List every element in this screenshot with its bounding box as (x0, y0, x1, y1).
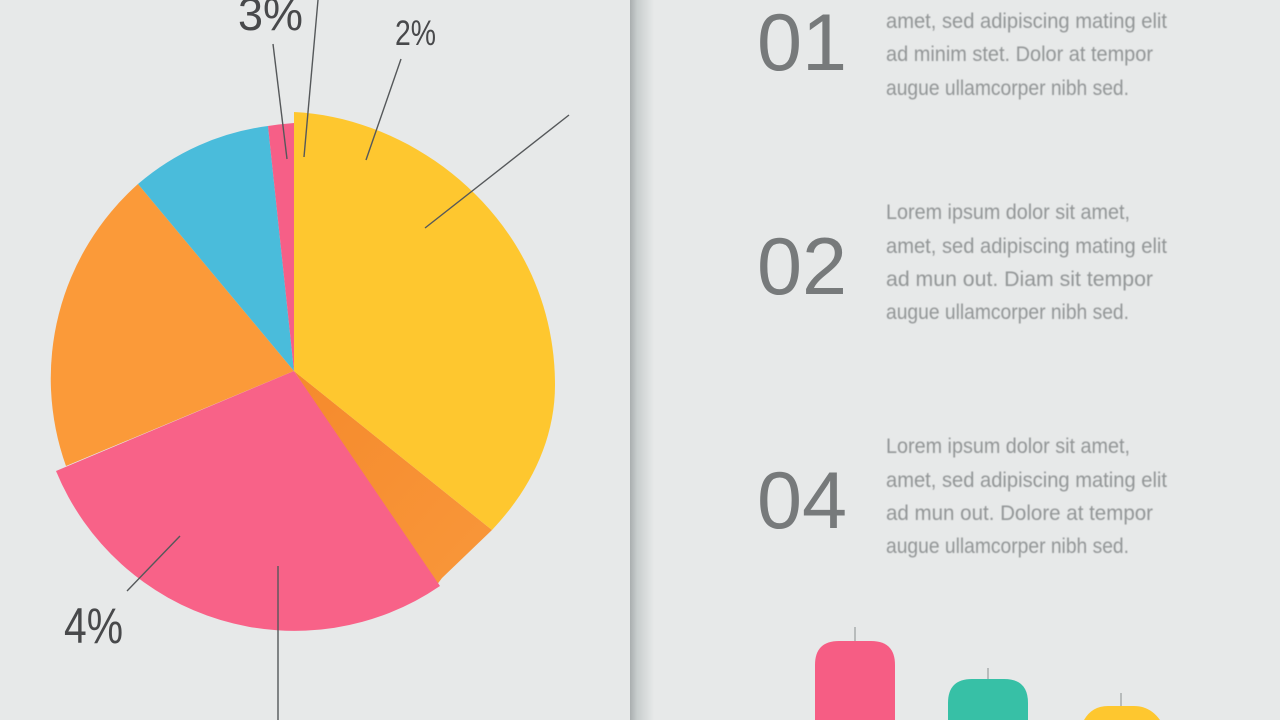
text block 04: augue ullamcorper nibh sed. (886, 535, 1129, 558)
bar: yellow (1084, 693, 1160, 720)
bar: teal (948, 668, 1028, 720)
text block 04: Lorem ipsum dolor sit amet, (886, 435, 1130, 458)
text block 01: amet, sed adipiscing mating elit (886, 10, 1167, 33)
slice: orange lower (294, 371, 492, 586)
text block 02: amet, sed adipiscing mating elit (886, 235, 1167, 258)
pie chart (51, 112, 555, 631)
slice: yellow (294, 112, 555, 530)
text block 01 (886, 10, 1167, 100)
panel divider fold (630, 0, 654, 720)
label: 4%: 4% (64, 598, 123, 654)
text block 02 (886, 201, 1167, 324)
bar chart (815, 627, 1160, 720)
number 01: 01 (757, 0, 847, 88)
text block 02: augue ullamcorper nibh sed. (886, 301, 1129, 324)
number 02: 02 (757, 222, 847, 312)
leader lines (127, 0, 569, 720)
slice: small pink (268, 123, 294, 371)
slice: orange left (51, 184, 294, 466)
number 04: 04 (757, 456, 847, 546)
bar: pink (815, 627, 895, 720)
slice: large pink (56, 371, 440, 631)
label: 2%: 2% (395, 14, 436, 53)
slice: blue (138, 126, 294, 371)
text block 01: augue ullamcorper nibh sed. (886, 77, 1129, 100)
text block 04 (886, 435, 1167, 558)
text block 04: ad mun out. Dolore at tempor (886, 502, 1153, 525)
text block 01: ad minim stet. Dolor at tempor (886, 43, 1153, 66)
text block 04: amet, sed adipiscing mating elit (886, 469, 1167, 492)
text block 02: Lorem ipsum dolor sit amet, (886, 201, 1130, 224)
text block 02: ad mun out. Diam sit tempor (886, 268, 1153, 291)
